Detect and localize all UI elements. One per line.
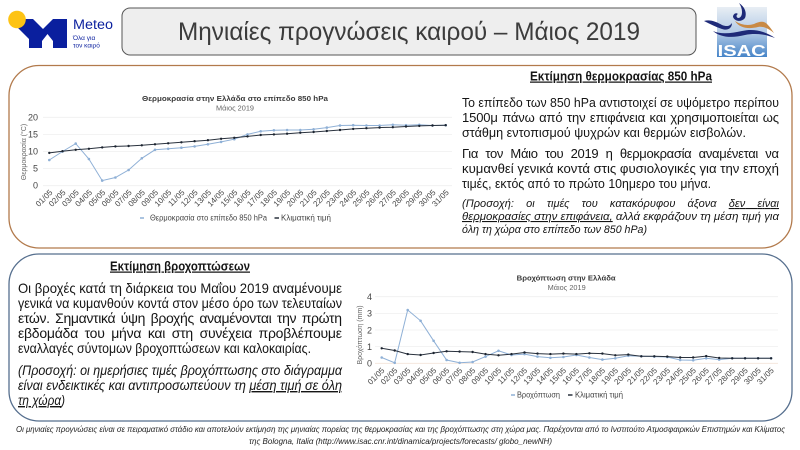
note: temperature axis caution [462, 198, 780, 236]
note: rainfall values caution: (Προσοχή: οι ημερήσιες τιμές βροχόπτωσης στο διάγραμμα [18, 362, 343, 378]
x axis labels: 04/05 [73, 188, 94, 209]
x axis labels: 13/05 [522, 366, 543, 387]
x axis labels: 08/05 [457, 366, 478, 387]
logo wordmark: Meteo [73, 17, 113, 32]
x axis labels: 24/05 [664, 366, 685, 387]
x axis labels: 25/05 [677, 366, 698, 387]
x axis labels: 14/05 [535, 366, 555, 387]
x axis labels: 26/05 [690, 366, 711, 387]
chart subtitle: Μάιος 2019 [216, 105, 254, 113]
x axis labels: 09/05 [140, 188, 160, 209]
text block: rainfall outlook: ετών. Σημαντικά ύψη βροχής αναμένονται την πρώτη [18, 310, 342, 326]
heading: temperature estimate: Εκτίμηση θερμοκρασίας 850 hPa [530, 70, 713, 84]
text block: rainfall outlook: εναλλαγές σύντομων βροχοπτώσεων και καλοκαιρίας. [18, 340, 311, 356]
series: climatic value [382, 348, 771, 358]
chart legend: Θερμοκρασία στο επίπεδο 850 hPa [150, 214, 268, 222]
x axis labels: 17/05 [574, 366, 594, 387]
x axis labels: 19/05 [272, 188, 293, 209]
logo tagline: τον καιρό [73, 42, 100, 50]
x axis labels: 12/05 [179, 188, 200, 209]
footer note [16, 425, 785, 446]
text block: 850 hPa explanation: στάθμη εντοπισμού ψυχρών και θερμών εισβολών. [462, 125, 746, 140]
chart legend [140, 214, 331, 222]
footer note: Οι μηνιαίες προγνώσεις είναι σε πειραματικό στάδιο και αποτελούν εκτίμηση της μηνιαίας πορείας της θερμοκρασίας και της βροχόπτωσης στη χώρα μας. Παρέχονται από το Ινστιτούτο Ατμοσφαιρικών Επιστημών και Κλίματος [16, 425, 785, 434]
x axis labels: 07/05 [113, 188, 134, 209]
x axis labels: 24/05 [338, 188, 359, 209]
logo swirl [733, 3, 746, 21]
title box [122, 8, 696, 55]
chart legend [511, 390, 623, 400]
text block: May 2019 outlook: Για τον Μάιο του 2019 η θερμοκρασία αναμένεται να [462, 146, 779, 161]
line chart: temperature [20, 94, 452, 222]
x axis labels: 20/05 [612, 366, 633, 387]
text block: rainfall outlook: Οι βροχές κατά τη διάρκεια του Μαΐου 2019 αναμένουμε [18, 280, 342, 296]
panel: temperature [9, 66, 792, 248]
x axis labels: 20/05 [285, 188, 306, 209]
x axis labels: 21/05 [298, 188, 319, 209]
series: climatic value [49, 125, 446, 153]
panel: rainfall [9, 254, 792, 421]
x axis labels: 05/05 [87, 188, 108, 209]
y axis ticks: 5 [33, 164, 38, 174]
chart legend: Βροχόπτωση [517, 390, 560, 400]
y axis ticks: 15 [28, 129, 38, 139]
text block: rainfall outlook: γενικά να κυμανθούν κοντά στον μέσο όρο των τελευταίων [18, 295, 342, 311]
y axis ticks [28, 112, 38, 191]
text block: 850 hPa explanation [462, 95, 779, 140]
y axis title: Θερμοκρασία (°C) [20, 124, 28, 180]
x axis labels: 10/05 [153, 188, 174, 209]
x axis labels: 03/05 [392, 366, 413, 387]
series: rainfall [382, 310, 771, 363]
x axis labels [34, 188, 451, 209]
x axis labels: 11/05 [166, 188, 187, 208]
note: temperature axis caution: (Προσοχή: οι τιμές του κατακόρυφου άξονα δεν είναι [462, 198, 780, 210]
note: temperature axis caution: θερμοκρασίες στην επιφάνεια, αλλά εκφράζουν τη μέση τιμή για [462, 211, 780, 223]
text block: rainfall outlook [18, 280, 342, 356]
x axis labels: 31/05 [755, 366, 776, 387]
x axis labels: 30/05 [742, 366, 763, 387]
footer note: της Bologna, Italία (http://www.isac.cnr.int/dinamica/projects/forecasts/ globo_newNH) [249, 437, 552, 446]
x axis labels: 14/05 [206, 188, 227, 209]
x axis labels: 09/05 [470, 366, 491, 387]
note: rainfall values caution [18, 362, 343, 408]
x axis labels: 18/05 [587, 366, 607, 387]
x axis labels: 12/05 [509, 366, 530, 387]
x axis labels: 31/05 [430, 188, 451, 209]
x axis labels: 17/05 [245, 188, 266, 209]
logo tagline: Όλα για [73, 35, 95, 42]
x axis labels: 04/05 [405, 366, 426, 387]
y axis ticks: 3 [367, 309, 372, 319]
x axis labels: 08/05 [126, 188, 147, 209]
x axis labels: 02/05 [47, 188, 68, 209]
x axis labels: 13/05 [192, 188, 213, 209]
x axis labels: 16/05 [232, 188, 253, 209]
logo square [717, 7, 767, 57]
logo text: ISAC [718, 43, 766, 60]
title text: Μηνιαίες προγνώσεις καιρού – Μάιος 2019 [178, 18, 640, 46]
x axis labels: 15/05 [548, 366, 568, 387]
x axis labels: 21/05 [625, 366, 646, 387]
text block: 850 hPa explanation: Το επίπεδο των 850 hPa αντιστοιχεί σε υψόμετρο περίπου [462, 95, 779, 110]
x axis labels: 19/05 [599, 366, 620, 387]
logo: Meteo [8, 11, 113, 49]
x axis labels: 23/05 [325, 188, 345, 209]
logo navy waves [704, 20, 775, 38]
y axis ticks: 1 [367, 342, 372, 352]
x axis labels: 18/05 [258, 188, 279, 209]
series: temperature at 850 hPa [49, 125, 446, 181]
x axis labels: 15/05 [219, 188, 240, 209]
logo orange wave [735, 21, 774, 33]
x axis labels: 11/05 [496, 366, 517, 386]
heading: rainfall estimate: Εκτίμηση βροχοπτώσεων [110, 260, 250, 274]
x axis labels: 22/05 [638, 366, 659, 387]
text block: rainfall outlook: εβδομάδα του μήνα και στη συνέχεια προβλέπουμε [18, 325, 342, 341]
x axis labels: 03/05 [60, 188, 81, 209]
chart legend: Κλιματική τιμή [575, 390, 623, 400]
text block: May 2019 outlook: κυμανθεί γενικά κοντά στις φυσιολογικές για την εποχή [462, 161, 779, 176]
y axis ticks: 10 [28, 146, 38, 156]
x axis labels: 30/05 [417, 188, 438, 209]
x axis labels: 29/05 [729, 366, 750, 387]
x axis labels: 27/05 [703, 366, 724, 387]
x axis labels: 10/05 [483, 366, 504, 387]
chart subtitle: Μάιος 2019 [548, 284, 586, 292]
y axis ticks [367, 292, 372, 369]
y axis ticks: 2 [367, 325, 372, 335]
x axis labels: 01/05 [366, 366, 387, 387]
x axis labels: 16/05 [561, 366, 581, 387]
note: rainfall values caution: τη χώρα) [18, 392, 65, 408]
text block: May 2019 outlook [462, 146, 779, 191]
x axis labels: 23/05 [651, 366, 672, 387]
x axis labels: 02/05 [379, 366, 400, 387]
x axis labels: 07/05 [444, 366, 465, 387]
x axis labels: 01/05 [34, 188, 55, 209]
note: rainfall values caution: είναι ενδεικτικές και αντιπροσωπεύουν τη μέση τιμή σε όλη [18, 377, 342, 393]
x axis labels: 06/05 [431, 366, 452, 387]
icon: blue M [17, 19, 67, 48]
y axis ticks: 0 [33, 181, 38, 191]
chart legend: Κλιματική τιμή [281, 214, 331, 222]
x axis labels: 22/05 [311, 188, 332, 209]
panel border [9, 254, 792, 421]
panel border [9, 66, 792, 248]
x axis labels [366, 366, 776, 387]
logo: ISAC [704, 3, 775, 60]
chart title: Βροχόπτωση στην Ελλάδα [517, 274, 616, 283]
icon: yellow sun [8, 11, 26, 28]
text block: 850 hPa explanation: 1500μ πάνω από την επιφάνεια και χρησιμοποιείται ως [462, 110, 779, 125]
note: temperature axis caution: όλη τη χώρα στο επίπεδο των 850 hPa) [462, 224, 647, 236]
y axis ticks: 0 [367, 359, 372, 369]
title [122, 8, 696, 55]
x axis labels: 26/05 [364, 188, 385, 209]
x axis labels: 28/05 [391, 188, 411, 209]
y axis ticks: 4 [367, 292, 372, 302]
x axis labels: 29/05 [404, 188, 425, 209]
x axis labels: 27/05 [377, 188, 398, 209]
chart title: Θερμοκρασία στην Ελλάδα στο επίπεδο 850 hPa [142, 94, 329, 103]
y axis ticks: 20 [28, 112, 38, 122]
x axis labels: 06/05 [100, 188, 121, 209]
text block: May 2019 outlook: τιμές, εκτός από το πρώτο 10ημερο του μήνα. [462, 176, 711, 191]
line chart: rainfall [356, 274, 778, 400]
x axis labels: 05/05 [418, 366, 439, 387]
x axis labels: 28/05 [716, 366, 737, 387]
y axis title: Βροχόπτωση (mm) [356, 305, 364, 365]
x axis labels: 25/05 [351, 188, 372, 209]
